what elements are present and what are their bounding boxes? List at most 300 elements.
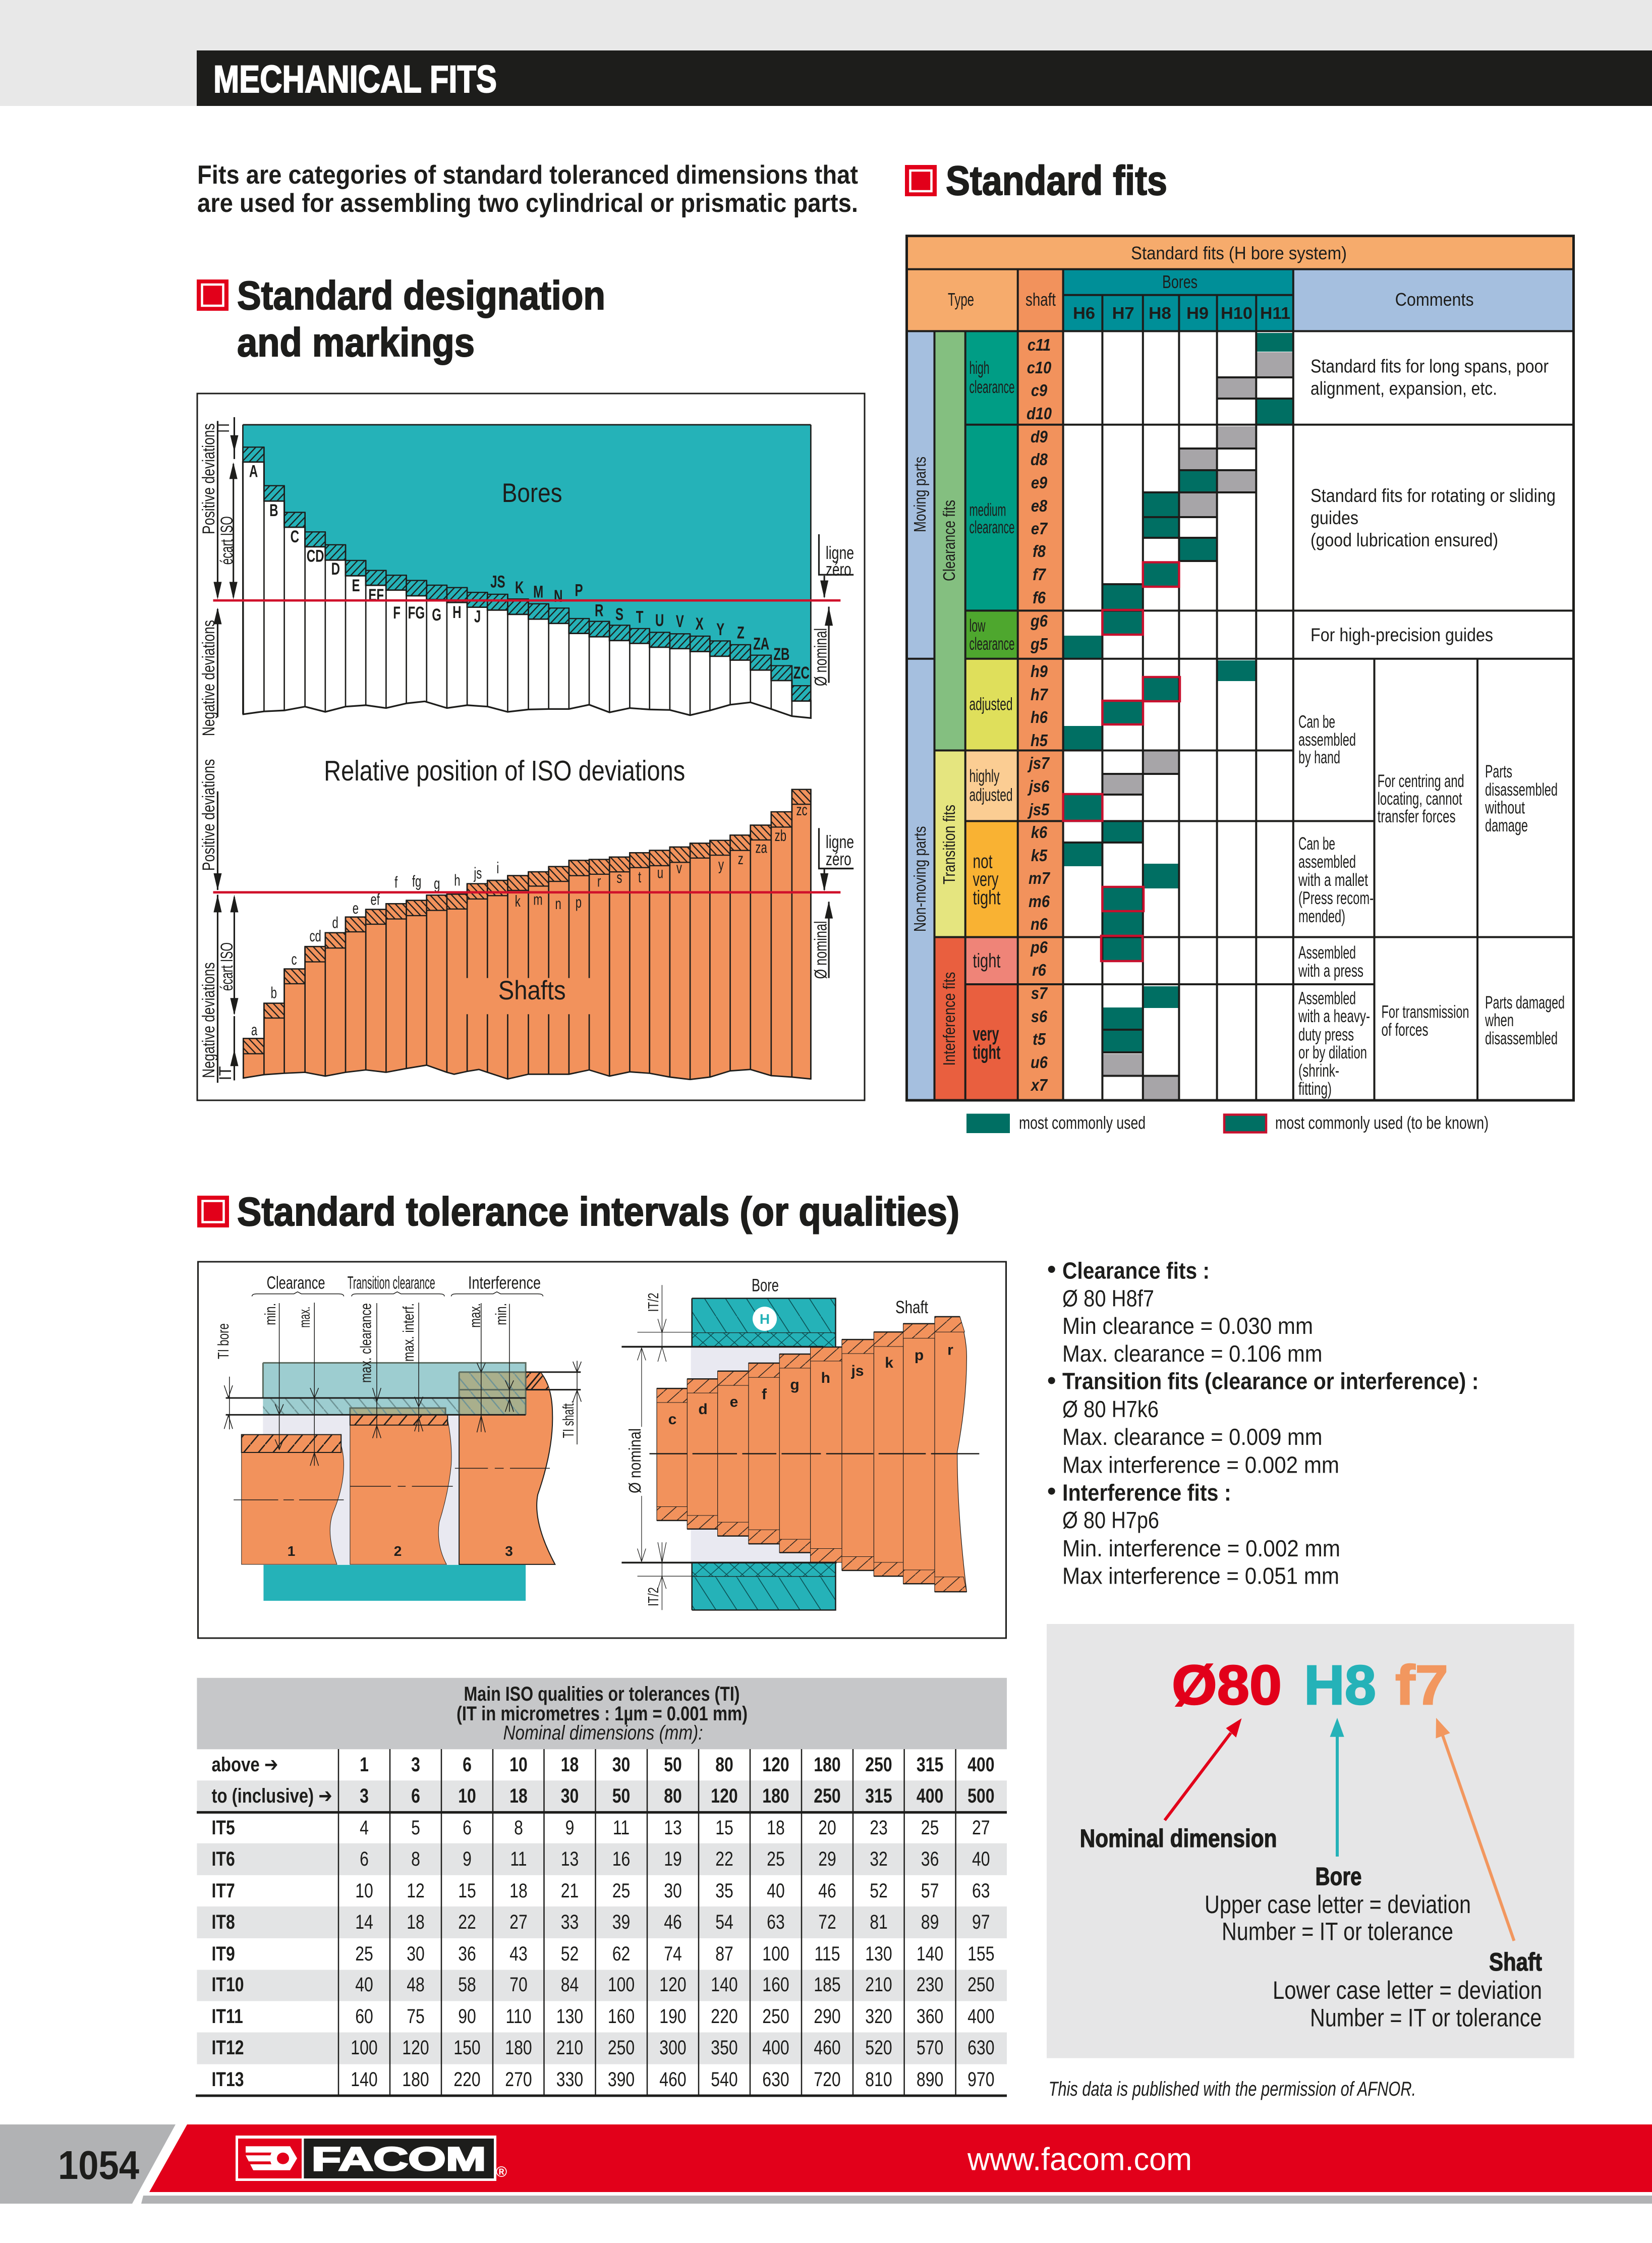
fit examples text: Max. clearance = 0.009 mm bbox=[1062, 1424, 1323, 1450]
comments: small: Parts bbox=[1485, 762, 1512, 781]
axis labels: zéro bbox=[826, 559, 851, 580]
legend bbox=[966, 1113, 1489, 1133]
permission note: This data is published with the permission of AFNOR. bbox=[1049, 2078, 1416, 2100]
shaft codes: js6 bbox=[1027, 777, 1050, 796]
table headings: H11 bbox=[1260, 304, 1290, 322]
bore letters bbox=[249, 462, 810, 683]
bore letters: S bbox=[615, 605, 623, 624]
cells to be known bbox=[1063, 562, 1180, 961]
shaft codes: k6 bbox=[1031, 823, 1048, 842]
deviation letters: h bbox=[821, 1370, 830, 1386]
diagram labels: rotated: min. bbox=[492, 1303, 510, 1325]
shaft codes: r6 bbox=[1032, 961, 1046, 979]
table values: 15 bbox=[715, 1816, 733, 1839]
shaft letters: a bbox=[251, 1021, 258, 1039]
bore letters: H bbox=[452, 603, 461, 622]
heading: standard designation and markings: and markings bbox=[237, 320, 475, 365]
bore letters: F bbox=[393, 603, 401, 623]
table values: 320 bbox=[865, 2005, 892, 2028]
deviation letters: r bbox=[947, 1342, 953, 1358]
table values: 27 bbox=[509, 1911, 528, 1933]
bore letters: X bbox=[696, 614, 704, 634]
fit type labels: tight bbox=[973, 887, 1001, 909]
table header: Main ISO qualities or tolerances (TI) bbox=[464, 1683, 739, 1705]
table headings: Standard fits (H bore system) bbox=[1131, 243, 1347, 263]
shaft letters: i bbox=[496, 859, 499, 877]
table values: 52 bbox=[561, 1942, 579, 1965]
table values: 9 bbox=[463, 1847, 472, 1870]
table values: 220 bbox=[711, 2005, 738, 2028]
table values: 18 bbox=[407, 1911, 425, 1933]
table values: 190 bbox=[659, 2005, 687, 2028]
deviation letters: js bbox=[850, 1363, 864, 1379]
table values: 29 bbox=[818, 1847, 836, 1870]
table values: 630 bbox=[762, 2068, 789, 2091]
shaft letters: p bbox=[576, 893, 582, 911]
comments: small: Can be bbox=[1298, 834, 1335, 854]
comments: large: For high-precision guides bbox=[1311, 625, 1493, 645]
designation notes: Number = IT or tolerance bbox=[1310, 2004, 1542, 2032]
comments: small: assembled bbox=[1298, 730, 1356, 750]
table values: 120 bbox=[762, 1753, 789, 1776]
shaft codes: js7 bbox=[1027, 754, 1050, 772]
shaft numbers: 1 bbox=[288, 1543, 295, 1559]
table values: 54 bbox=[715, 1911, 733, 1933]
diagram labels: top bbox=[267, 1273, 541, 1293]
table headings: Type bbox=[948, 289, 974, 310]
bore letters: EF bbox=[368, 586, 384, 605]
table values: 30 bbox=[664, 1879, 682, 1902]
shaft letters: f bbox=[394, 874, 398, 891]
row labels: IT8 bbox=[212, 1911, 235, 1933]
intro text: are used for assembling two cylindrical or prismatic parts. bbox=[197, 189, 858, 218]
row labels: IT9 bbox=[212, 1942, 235, 1965]
designation notes: Number = IT or tolerance bbox=[1222, 1918, 1453, 1946]
shaft codes: h6 bbox=[1031, 708, 1048, 726]
table values: 15 bbox=[458, 1879, 476, 1902]
table values: 630 bbox=[967, 2036, 994, 2059]
shaft letters: z bbox=[738, 850, 744, 868]
row labels: IT7 bbox=[212, 1879, 235, 1902]
comments: small bbox=[1298, 712, 1565, 1099]
fit type labels: not bbox=[973, 851, 993, 873]
table values: 315 bbox=[865, 1784, 892, 1807]
table values: 150 bbox=[453, 2036, 481, 2059]
designation code: Ø80 bbox=[1172, 1654, 1282, 1716]
table headings: H9 bbox=[1186, 304, 1209, 322]
bore letters: D bbox=[331, 559, 340, 579]
row labels: above ➔ bbox=[212, 1753, 278, 1776]
table values: 60 bbox=[355, 2005, 373, 2028]
diagram labels: rotated: max. bbox=[296, 1307, 313, 1328]
shaft letters bbox=[251, 801, 808, 1039]
table values: 19 bbox=[664, 1847, 682, 1870]
axis labels: Ø nominal bbox=[812, 628, 830, 686]
shaft letters: s bbox=[616, 869, 622, 886]
bore and shaft labels: Shaft bbox=[895, 1298, 928, 1317]
table values: 290 bbox=[814, 2005, 841, 2028]
table values: 180 bbox=[402, 2068, 429, 2091]
table values: 10 bbox=[509, 1753, 528, 1776]
axis labels: Negative deviations bbox=[199, 962, 218, 1078]
bore letters: R bbox=[595, 601, 603, 620]
table values: 460 bbox=[659, 2068, 687, 2091]
deviation letters: p bbox=[915, 1347, 924, 1364]
row labels: IT13 bbox=[212, 2068, 244, 2091]
panel: fit diagrams bbox=[198, 1262, 1006, 1638]
comments: small: transfer forces bbox=[1378, 807, 1456, 826]
bore letters: A bbox=[249, 462, 258, 481]
comments: small: when bbox=[1485, 1011, 1514, 1030]
table values: 97 bbox=[972, 1911, 990, 1933]
table values: 12 bbox=[407, 1879, 425, 1902]
comments: small: Can be bbox=[1298, 712, 1335, 732]
axis labels: zéro bbox=[826, 849, 851, 869]
table values: 22 bbox=[458, 1911, 476, 1933]
fit type labels: very bbox=[973, 869, 999, 890]
table values: 25 bbox=[921, 1816, 939, 1839]
bore and shaft labels: IT/2 bbox=[646, 1293, 662, 1312]
table values: 13 bbox=[561, 1847, 579, 1870]
shaft codes: d8 bbox=[1031, 450, 1048, 469]
fit examples text: Transition fits (clearance or interference) : bbox=[1062, 1368, 1479, 1394]
shaft codes: c11 bbox=[1028, 335, 1051, 354]
table values: 10 bbox=[355, 1879, 373, 1902]
table values: 8 bbox=[411, 1847, 420, 1870]
fit type labels: tight bbox=[973, 950, 1001, 972]
table values: 10 bbox=[458, 1784, 476, 1807]
table values: 20 bbox=[818, 1816, 836, 1839]
table values: 84 bbox=[561, 1973, 579, 1996]
matrix cells: other fits bbox=[1102, 352, 1293, 1100]
deviation letters: f bbox=[762, 1386, 767, 1403]
table values: 40 bbox=[972, 1847, 990, 1870]
comments: small: with a mallet bbox=[1298, 870, 1368, 890]
fit type labels: clearance bbox=[970, 377, 1015, 397]
table values: 6 bbox=[463, 1753, 472, 1776]
row category fills bbox=[907, 331, 1018, 1100]
diagram labels: rotated: max. clearance bbox=[357, 1303, 374, 1383]
vertical category labels: Transition fits bbox=[940, 805, 958, 884]
striped rows bbox=[197, 1780, 1007, 2064]
table headings: H10 bbox=[1221, 304, 1252, 322]
table values: 57 bbox=[921, 1879, 939, 1902]
vertical category labels: Interference fits bbox=[940, 972, 958, 1066]
logo: FACOM: ® bbox=[496, 2164, 507, 2180]
header fills bbox=[907, 236, 1574, 1100]
designation notes: Upper case letter = deviation bbox=[1205, 1890, 1471, 1919]
bore letters: ZC bbox=[793, 663, 810, 683]
fit examples text: Ø 80 H7p6 bbox=[1062, 1507, 1159, 1533]
shaft codes: f6 bbox=[1033, 588, 1046, 607]
panel: standard fits table bbox=[907, 236, 1574, 1133]
table values: 63 bbox=[972, 1879, 990, 1902]
table values: 80 bbox=[664, 1784, 682, 1807]
table values: 180 bbox=[762, 1784, 789, 1807]
shaft codes: d10 bbox=[1027, 404, 1052, 423]
table headings: H7 bbox=[1112, 304, 1134, 322]
table values: 540 bbox=[711, 2068, 738, 2091]
table values: 330 bbox=[556, 2068, 583, 2091]
table values: 460 bbox=[814, 2036, 841, 2059]
table values: 220 bbox=[453, 2068, 481, 2091]
table values: 40 bbox=[767, 1879, 785, 1902]
table values: 50 bbox=[664, 1753, 682, 1776]
fit type labels: adjusted bbox=[970, 785, 1013, 805]
fit examples text bbox=[1048, 1258, 1479, 1589]
table rules bbox=[338, 1749, 956, 2095]
comments: small: with a press bbox=[1298, 961, 1363, 981]
bores label: Bores bbox=[502, 478, 562, 508]
table values: 11 bbox=[510, 1847, 527, 1870]
bore letters: T bbox=[636, 608, 643, 627]
shaft letters: g bbox=[434, 875, 440, 892]
vertical category labels bbox=[910, 457, 958, 1066]
shaft letters: ef bbox=[371, 891, 380, 908]
axis labels: ligne bbox=[826, 543, 854, 563]
shaft codes: s6 bbox=[1031, 1007, 1048, 1026]
table values: 43 bbox=[509, 1942, 528, 1965]
fit examples text: Max interference = 0.051 mm bbox=[1062, 1563, 1339, 1589]
arrow: nominal bbox=[1165, 1718, 1242, 1820]
diagram labels: top: Interference bbox=[468, 1273, 541, 1293]
comments: small: Parts damaged bbox=[1485, 993, 1565, 1013]
table headings: Comments bbox=[1395, 289, 1474, 310]
bore letters: Y bbox=[716, 620, 724, 639]
shaft codes: e9 bbox=[1031, 473, 1048, 492]
shaft codes: u6 bbox=[1031, 1053, 1048, 1072]
panel: designation example bbox=[1047, 1624, 1574, 2058]
table values: 130 bbox=[556, 2005, 583, 2028]
fit examples text: Min clearance = 0.030 mm bbox=[1062, 1313, 1313, 1339]
table values: 39 bbox=[612, 1911, 630, 1933]
bore letters: P bbox=[575, 581, 583, 600]
table values: 270 bbox=[505, 2068, 532, 2091]
deviation letters: d bbox=[698, 1401, 708, 1418]
chart subtitle: Relative position of ISO deviations bbox=[324, 755, 685, 787]
diagram labels: rotated: min. bbox=[261, 1303, 279, 1325]
bore letters: V bbox=[676, 612, 684, 631]
row labels: IT10 bbox=[212, 1973, 244, 1996]
heading: standard designation and markings: Standard designation bbox=[237, 273, 605, 318]
bore letters: K bbox=[515, 578, 524, 597]
heading: standard tolerance intervals: Standard tolerance intervals (or qualities) bbox=[237, 1189, 959, 1234]
shaft letters: za bbox=[755, 839, 768, 856]
chart: bores deviations bbox=[243, 425, 811, 718]
table values: 90 bbox=[458, 2005, 476, 2028]
designation notes: Shaft bbox=[1489, 1948, 1542, 1976]
comments: small: Assembled bbox=[1298, 943, 1356, 963]
shaft codes bbox=[1027, 335, 1052, 1094]
shaft letters: fg bbox=[412, 873, 421, 890]
fit type labels: clearance bbox=[970, 634, 1015, 654]
fit type labels: very bbox=[973, 1023, 999, 1045]
shaft codes: g5 bbox=[1030, 635, 1048, 653]
designation notes: Lower case letter = deviation bbox=[1273, 1976, 1542, 2004]
shaft letters: zc bbox=[796, 801, 808, 819]
bore letters: Z bbox=[737, 624, 745, 643]
table values: 130 bbox=[865, 1942, 892, 1965]
vertical category labels: Non-moving parts bbox=[910, 826, 929, 932]
comments: small: damage bbox=[1485, 816, 1528, 835]
table values: 74 bbox=[664, 1942, 682, 1965]
table values: 520 bbox=[865, 2036, 892, 2059]
table headings: Bores bbox=[1162, 271, 1198, 292]
header band bbox=[0, 0, 1652, 106]
table values: 100 bbox=[351, 2036, 378, 2059]
diagram labels: top: Clearance bbox=[267, 1273, 325, 1293]
comments: small: For centring and bbox=[1378, 771, 1464, 791]
deviation letters: g bbox=[790, 1377, 800, 1393]
comments: large: Standard fits for rotating or sliding bbox=[1311, 485, 1556, 506]
table values: 89 bbox=[921, 1911, 939, 1933]
table values: 87 bbox=[715, 1942, 733, 1965]
table values: 6 bbox=[411, 1784, 420, 1807]
shaft codes: js5 bbox=[1027, 800, 1050, 819]
table headings: H8 bbox=[1149, 304, 1171, 322]
shaft letters: m bbox=[533, 891, 543, 908]
comments: small: or by dilation bbox=[1298, 1043, 1367, 1062]
table values: 25 bbox=[767, 1847, 785, 1870]
table values: 32 bbox=[870, 1847, 888, 1870]
shaft codes: c10 bbox=[1027, 358, 1051, 377]
table values: 120 bbox=[402, 2036, 429, 2059]
axis labels: Positive deviations bbox=[199, 759, 218, 871]
table values: 27 bbox=[972, 1816, 990, 1839]
arrow: shaft bbox=[1436, 1718, 1514, 1941]
shaft codes: c9 bbox=[1031, 381, 1048, 400]
shaft letters: js bbox=[474, 865, 482, 882]
table values: 180 bbox=[814, 1753, 841, 1776]
shaft letters: c bbox=[291, 951, 297, 968]
axis labels bbox=[199, 421, 854, 1081]
shaft codes: x7 bbox=[1030, 1076, 1048, 1094]
table values: 185 bbox=[814, 1973, 841, 1996]
designation notes: Bore bbox=[1316, 1863, 1362, 1891]
table values: 160 bbox=[608, 2005, 635, 2028]
table values: 500 bbox=[967, 1784, 994, 1807]
table values: 46 bbox=[818, 1879, 836, 1902]
arrow: bore bbox=[1330, 1718, 1344, 1857]
fit type labels: medium bbox=[970, 500, 1006, 520]
comments: small: assembled bbox=[1298, 852, 1356, 872]
table values: 180 bbox=[505, 2036, 532, 2059]
fit examples text: Max interference = 0.002 mm bbox=[1062, 1452, 1339, 1478]
fit examples text: Max. clearance = 0.106 mm bbox=[1062, 1340, 1323, 1367]
comments: large bbox=[1311, 356, 1556, 645]
shaft codes: h9 bbox=[1031, 662, 1048, 681]
table values: 14 bbox=[355, 1911, 373, 1933]
table values: 1 bbox=[360, 1753, 369, 1776]
table values: 4 bbox=[360, 1816, 369, 1839]
intro text: Fits are categories of standard toleranced dimensions that bbox=[197, 160, 858, 190]
row labels: to (inclusive) ➔ bbox=[212, 1784, 332, 1807]
table values: 75 bbox=[407, 2005, 425, 2028]
shaft letters: r bbox=[597, 873, 601, 890]
table headings: shaft bbox=[1026, 289, 1056, 310]
bore letters: G bbox=[432, 605, 441, 625]
table values: 30 bbox=[407, 1942, 425, 1965]
row labels: IT6 bbox=[212, 1847, 235, 1870]
comments: small: Assembled bbox=[1298, 989, 1356, 1008]
shaft numbers: 3 bbox=[505, 1543, 513, 1559]
fit examples text: Ø 80 H7k6 bbox=[1062, 1396, 1159, 1422]
shaft codes: m6 bbox=[1029, 892, 1050, 911]
website: www.facom.com bbox=[967, 2142, 1192, 2177]
shaft codes: e7 bbox=[1031, 519, 1048, 538]
table values: 250 bbox=[865, 1753, 892, 1776]
table values: 35 bbox=[715, 1879, 733, 1902]
designation code: H8 bbox=[1304, 1654, 1376, 1716]
table values: 210 bbox=[556, 2036, 583, 2059]
legend: most commonly used (to be known) bbox=[1275, 1113, 1489, 1133]
comments: small: disassembled bbox=[1485, 1029, 1558, 1048]
shaft codes: f7 bbox=[1033, 565, 1047, 584]
table values: 720 bbox=[814, 2068, 841, 2091]
comments: small: locating, cannot bbox=[1378, 789, 1462, 809]
comments: large: Standard fits for long spans, poor bbox=[1311, 356, 1549, 376]
intro text bbox=[197, 160, 858, 218]
table values: 22 bbox=[715, 1847, 733, 1870]
table values: 33 bbox=[561, 1911, 579, 1933]
table values: 155 bbox=[967, 1942, 994, 1965]
shaft codes: h5 bbox=[1031, 731, 1048, 750]
shaft codes: s7 bbox=[1031, 984, 1048, 1002]
axis labels: Negative deviations bbox=[199, 620, 218, 736]
title: MECHANICAL FITS bbox=[213, 58, 497, 101]
shaft numbers bbox=[288, 1543, 513, 1559]
axis labels: écart ISO bbox=[217, 516, 237, 565]
table values: 62 bbox=[612, 1942, 630, 1965]
table values: 140 bbox=[711, 1973, 738, 1996]
table values: 72 bbox=[818, 1911, 836, 1933]
shaft letters: v bbox=[676, 859, 682, 877]
table values: 230 bbox=[917, 1973, 943, 1996]
deviation letters: c bbox=[668, 1411, 676, 1428]
table values: 18 bbox=[509, 1879, 528, 1902]
table values: 810 bbox=[865, 2068, 892, 2091]
table values: 110 bbox=[505, 2005, 532, 2028]
table header: Nominal dimensions (mm): bbox=[503, 1722, 703, 1744]
table values: 120 bbox=[711, 1784, 738, 1807]
shaft codes: m7 bbox=[1029, 869, 1051, 887]
table values: 9 bbox=[565, 1816, 574, 1839]
table values: 3 bbox=[360, 1784, 369, 1807]
table values: 115 bbox=[814, 1942, 840, 1965]
table header: (IT in micrometres : 1µm = 0.001 mm) bbox=[457, 1703, 748, 1725]
diagram: bore and shaft positions bbox=[621, 1276, 979, 1610]
fit examples text: Min. interference = 0.002 mm bbox=[1062, 1535, 1340, 1561]
table values: 8 bbox=[514, 1816, 523, 1839]
table values: 140 bbox=[917, 1942, 943, 1965]
bore marker: H bbox=[760, 1311, 770, 1327]
shaft codes: g6 bbox=[1030, 611, 1048, 630]
shafts label: Shafts bbox=[498, 975, 566, 1005]
diagram labels: rotated: TI bore bbox=[214, 1323, 232, 1359]
logo: FACOM: FACOM bbox=[312, 2140, 486, 2177]
shaft letters: k bbox=[515, 892, 521, 910]
table values: 6 bbox=[463, 1816, 472, 1839]
table values: 250 bbox=[814, 1784, 841, 1807]
legend: most commonly used bbox=[1019, 1113, 1146, 1133]
table values bbox=[351, 1753, 994, 2091]
axis labels: IT bbox=[216, 1066, 235, 1081]
comments: small: disassembled bbox=[1485, 780, 1558, 800]
bore letters: J bbox=[474, 607, 481, 627]
bore and shaft labels: Bore bbox=[752, 1276, 779, 1296]
bore letters: U bbox=[655, 611, 664, 630]
table values: 36 bbox=[921, 1847, 939, 1870]
